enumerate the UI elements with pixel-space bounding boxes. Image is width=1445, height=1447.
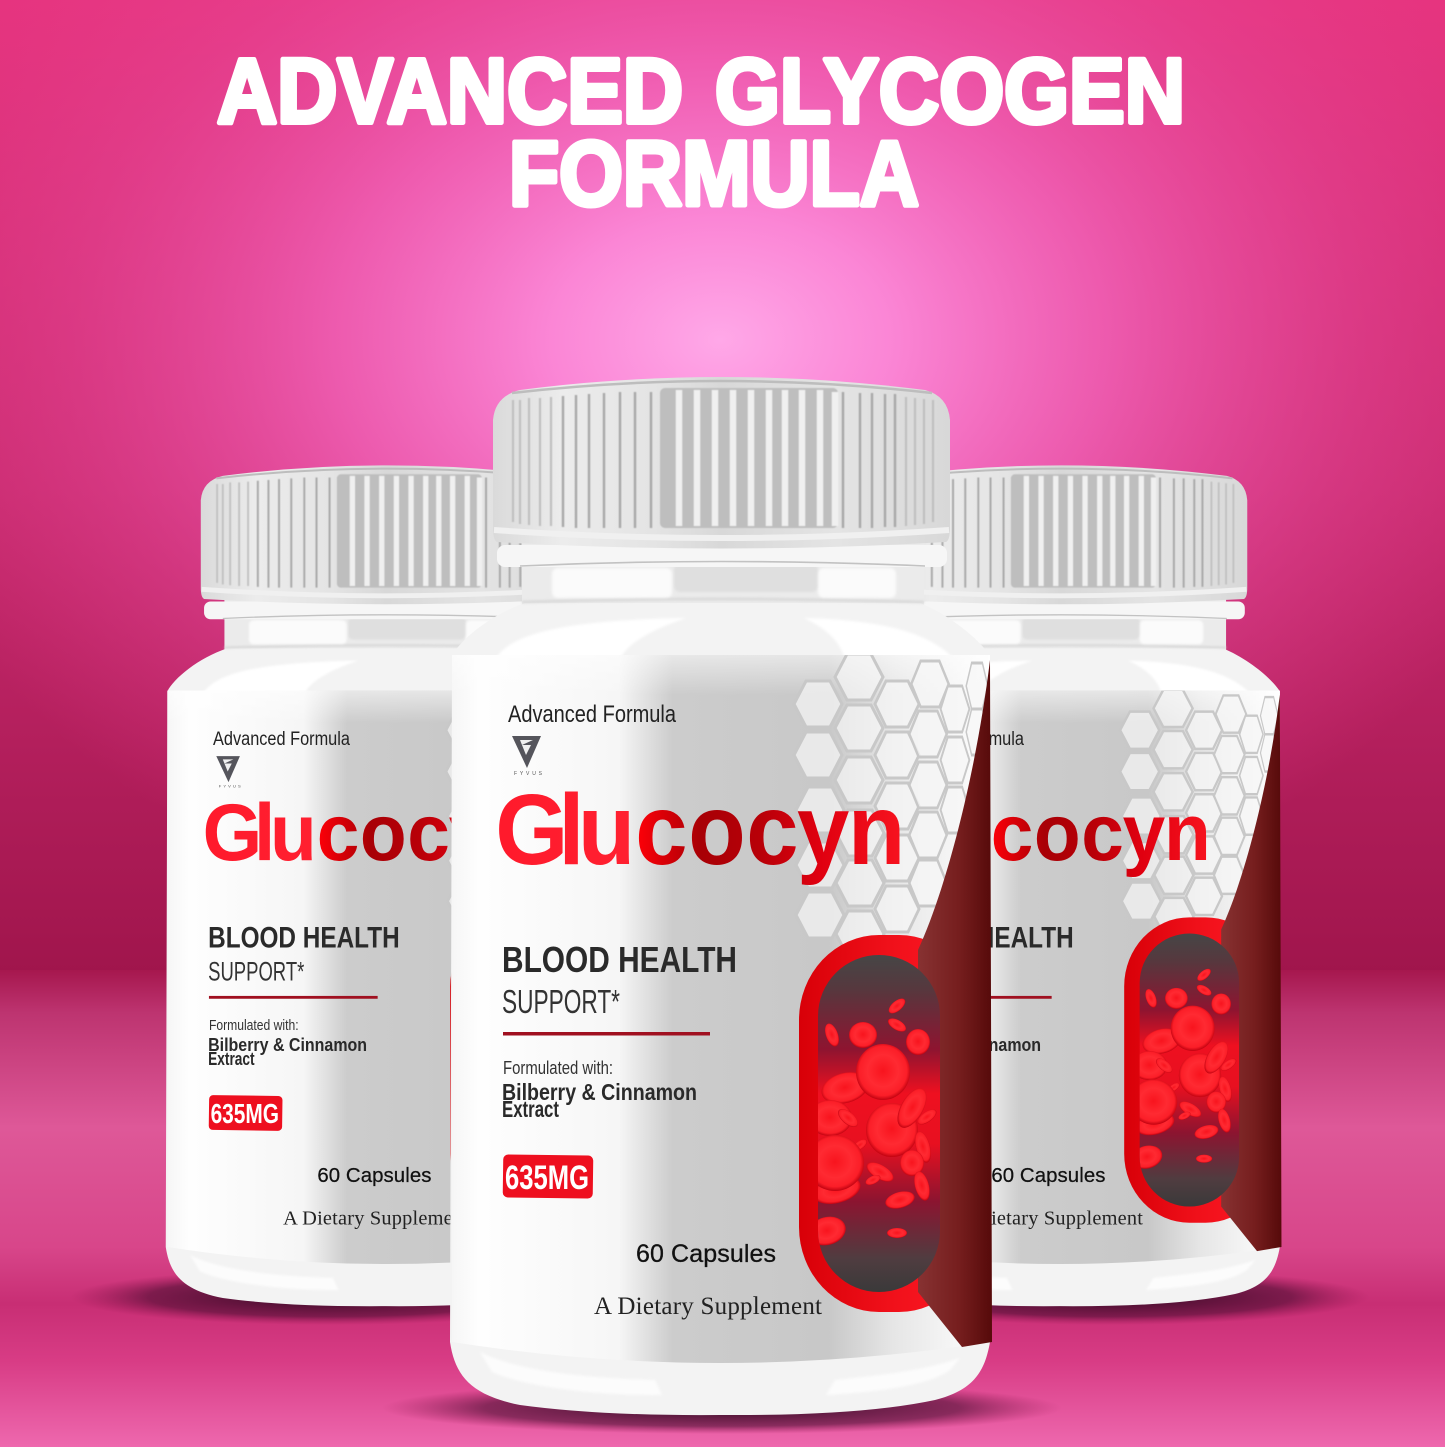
left bottle: 60 Capsules — [317, 1165, 431, 1187]
label: brand name: Glucocyn — [495, 773, 905, 886]
label: advanced formula: Advanced Formula — [508, 701, 677, 728]
title: FORMULA — [509, 123, 919, 225]
bottle body, cap, label art — [450, 377, 992, 1415]
title: GLYCOGEN — [715, 40, 1185, 142]
left bottle — [166, 465, 607, 1306]
background backdrop wall — [0, 0, 1445, 975]
left bottle: SUPPORT* — [208, 957, 305, 987]
left bottle: BLOOD HEALTH — [208, 922, 400, 954]
left bottle: Glucocyn — [203, 787, 537, 877]
right bottle: Advanced Formula — [887, 728, 1024, 750]
left bottle: Extract — [208, 1048, 255, 1069]
label: dietary supplement: A Dietary Supplement — [594, 1293, 822, 1320]
title — [217, 40, 1185, 225]
label: blood health: BLOOD HEALTH — [502, 939, 737, 980]
left bottle: 635MG — [211, 1098, 279, 1129]
right bottle: Bilberry & Cinnamon — [882, 1034, 1041, 1055]
shadow under centre bottle — [382, 1382, 1062, 1434]
label: logo wordmark: FYVUS — [514, 771, 543, 777]
title: ADVANCED — [217, 40, 683, 142]
label: ingredients: Bilberry & Cinnamon — [502, 1079, 697, 1105]
right bottle — [840, 465, 1281, 1306]
label: capsule count: 60 Capsules — [636, 1240, 776, 1268]
shadow under left bottle — [70, 1269, 590, 1325]
left bottle: FYVUS — [219, 784, 241, 789]
background central glow — [0, 0, 1445, 975]
shadow under right bottle — [850, 1269, 1370, 1325]
label: formulated with: Formulated with: — [503, 1058, 613, 1078]
label: extract: Extract — [502, 1096, 559, 1122]
right bottle: A Dietary Supplement — [957, 1207, 1143, 1229]
label: support: SUPPORT* — [502, 983, 620, 1020]
label: dosage badge text: 635MG — [505, 1159, 589, 1197]
left bottle: A Dietary Supplement — [283, 1207, 469, 1229]
left bottle: Formulated with: — [209, 1018, 299, 1034]
left bottle: Advanced Formula — [213, 728, 350, 750]
centre bottle — [450, 377, 992, 1415]
right bottle: Glucocyn — [877, 787, 1211, 877]
right bottle: 60 Capsules — [991, 1165, 1105, 1187]
left bottle: Bilberry & Cinnamon — [208, 1034, 367, 1055]
floor — [0, 970, 1445, 1447]
right bottle: BLOOD HEALTH — [882, 922, 1074, 954]
